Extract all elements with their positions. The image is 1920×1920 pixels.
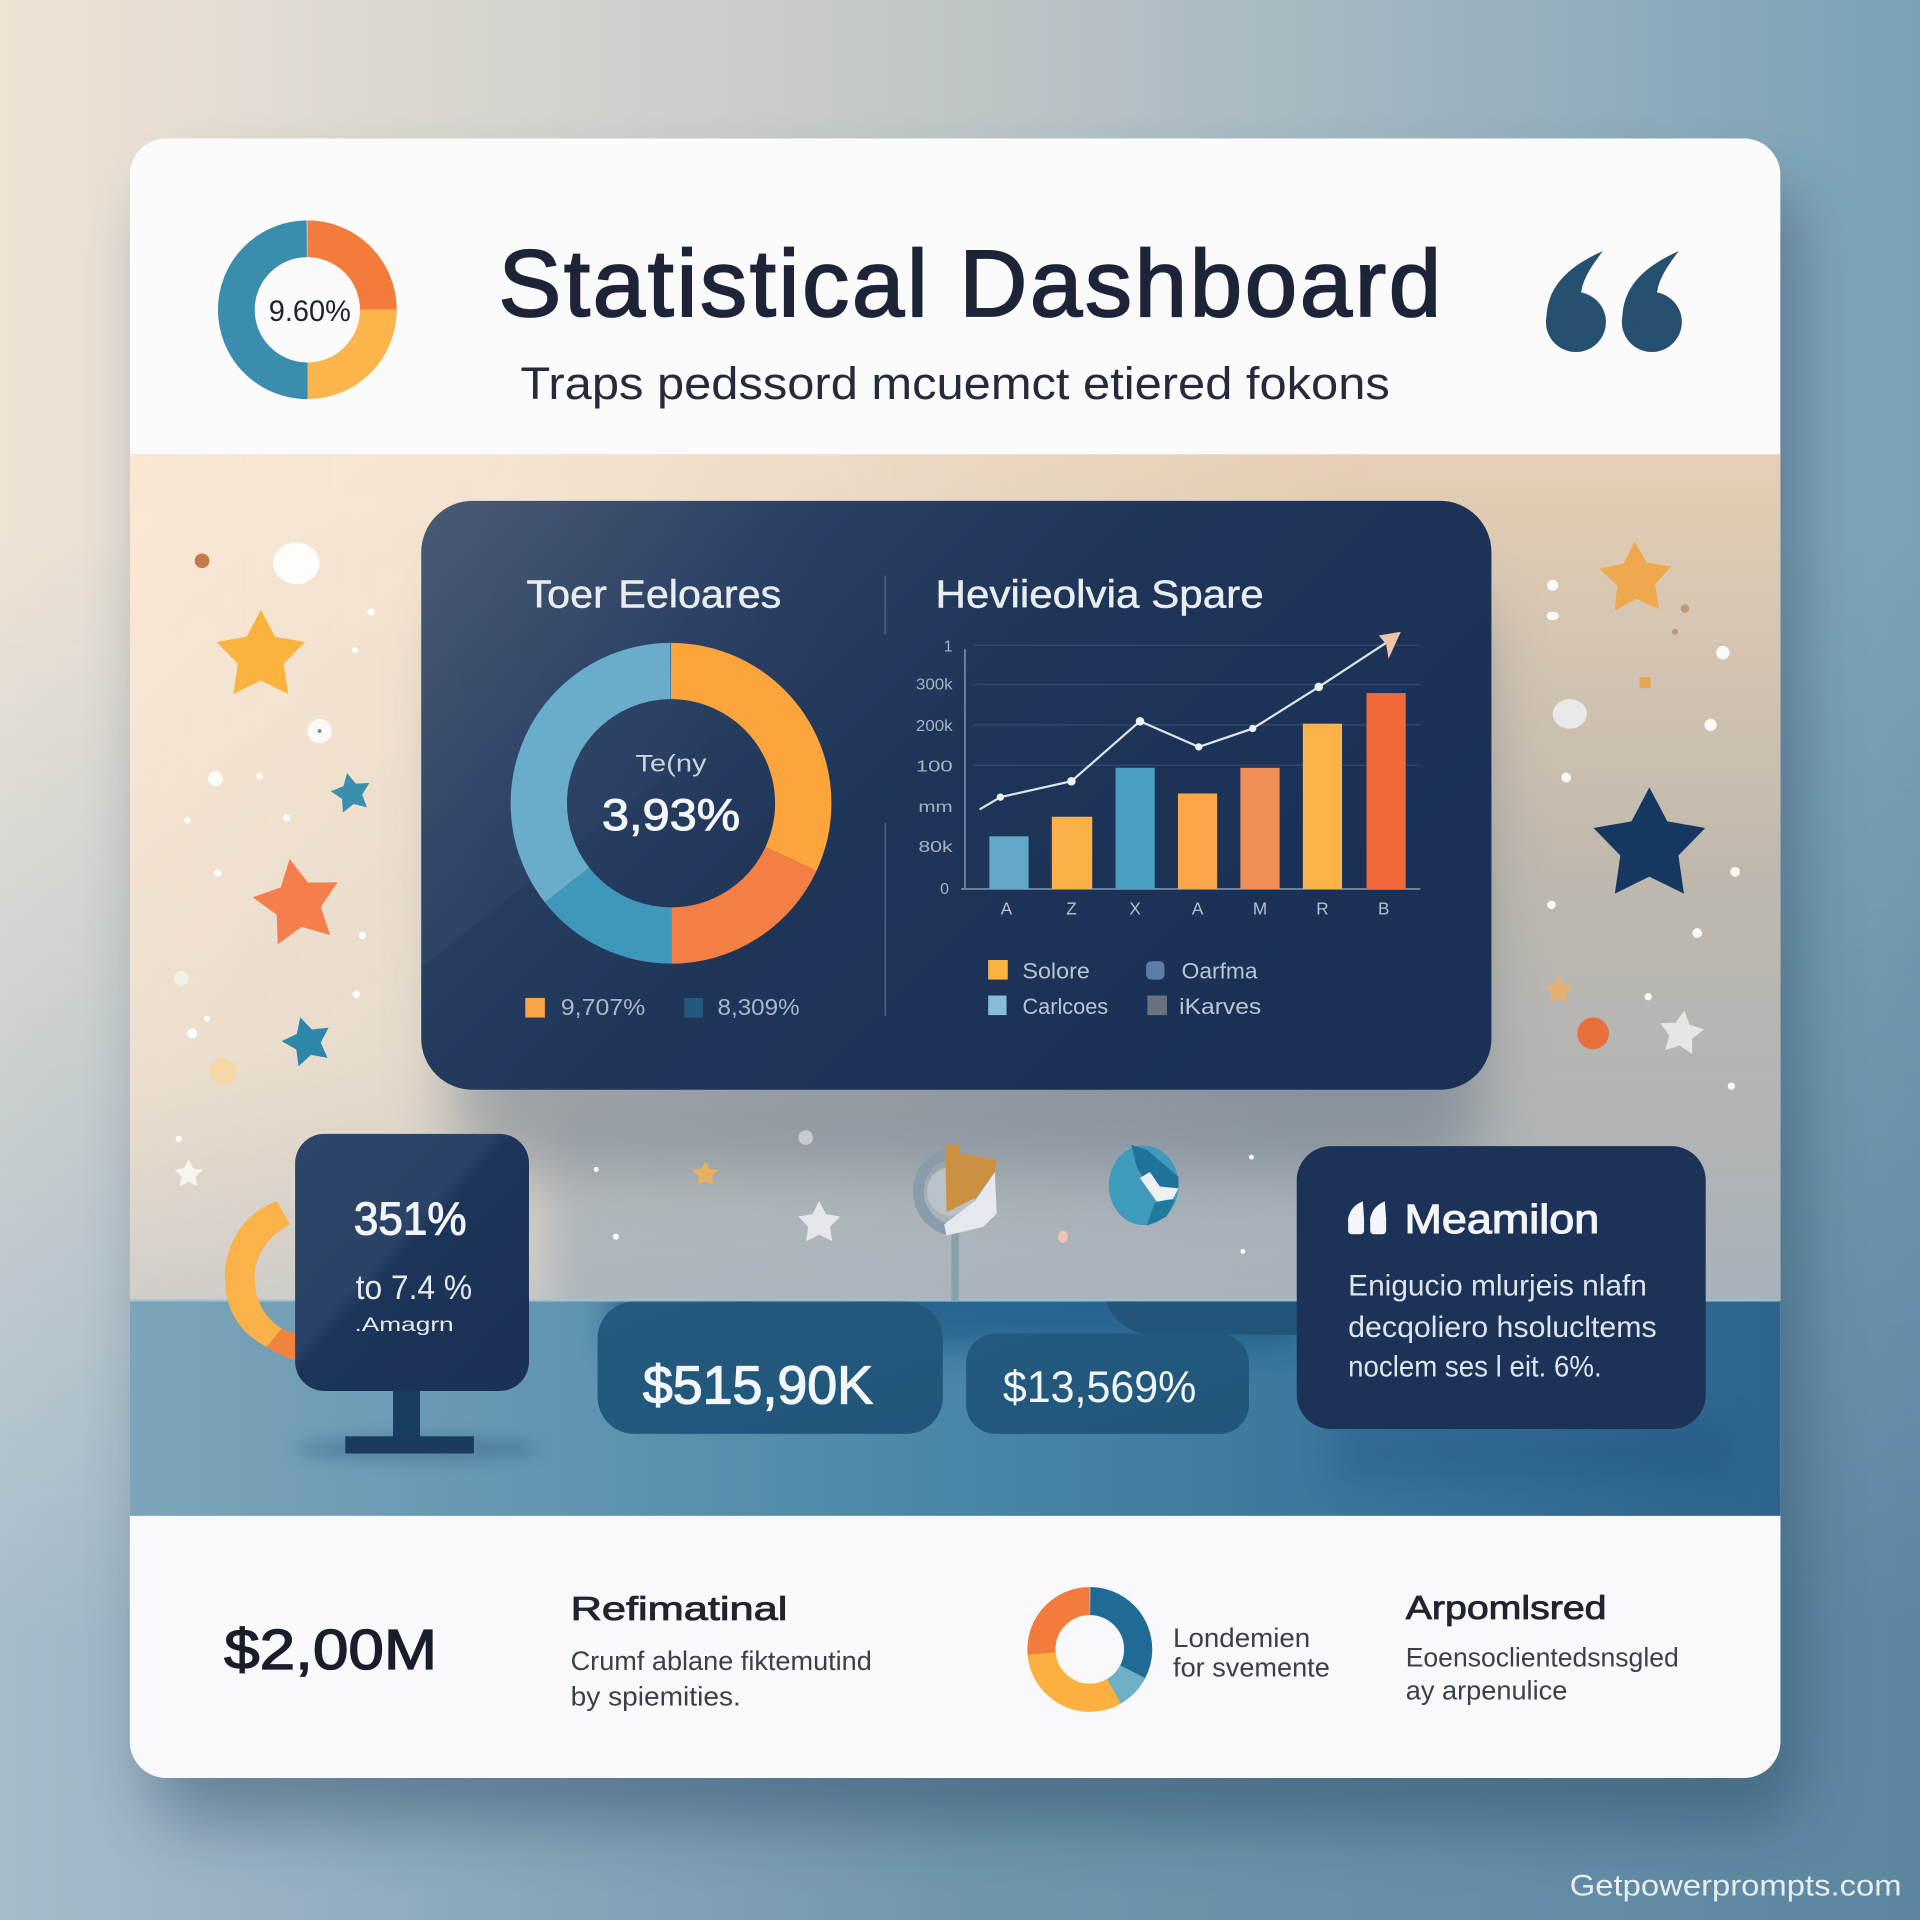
gauge arc (225, 1201, 296, 1360)
x axis labels: Z (1066, 899, 1077, 919)
stat pill: revenue (598, 1302, 943, 1434)
bar chart legend: Oarfma (1182, 958, 1258, 983)
small floating stars and dots (594, 1130, 1254, 1254)
quote card (1297, 1146, 1706, 1429)
x axis labels: R (1316, 899, 1329, 919)
donut chart: Te(ny (636, 750, 707, 777)
donut chart: 3,93% (602, 791, 740, 840)
icon: teal globe (1109, 1145, 1179, 1226)
header donut: 9.60% (269, 295, 351, 328)
dashboard panel (421, 501, 1491, 1090)
x axis labels: M (1253, 899, 1267, 919)
bar chart (916, 632, 1420, 919)
footer text block: left: by spiemities. (571, 1682, 741, 1712)
footer text block: left: Refimatinal (571, 1591, 787, 1628)
quote icon (1348, 1201, 1386, 1234)
ground band (130, 1299, 1780, 1516)
footer stat: $2,00M (224, 1618, 437, 1681)
trend line (980, 632, 1401, 809)
monitor screen: .Amagrn (354, 1314, 454, 1336)
bar chart legend: Solore (1022, 958, 1090, 983)
y axis labels: 100 (916, 758, 953, 775)
y axis labels: 300k (916, 676, 953, 693)
header donut (236, 239, 378, 381)
x axis labels: A (1192, 899, 1204, 919)
title: Statistical Dashboard (498, 231, 1441, 336)
footer donut caption: for svemente (1173, 1652, 1330, 1682)
main card (130, 138, 1780, 1778)
watermark: Getpowerprompts.com (1570, 1870, 1902, 1903)
decorative stars left (174, 542, 375, 1186)
quote card backdrop (1106, 1302, 1300, 1335)
bar chart legend: Carlcoes (1022, 994, 1108, 1019)
decorative stars right (1545, 540, 1740, 1090)
bar chart legend (988, 958, 1261, 1019)
stat pill: secondary (966, 1333, 1249, 1434)
footer donut (1041, 1601, 1138, 1698)
quote body (1348, 1270, 1657, 1383)
footer text block: right: ay arpenulice (1406, 1676, 1567, 1706)
donut legend: 9,707% (561, 994, 645, 1020)
footer text block: right (1406, 1590, 1679, 1706)
bar chart heading: Heviieolvia Spare (936, 573, 1264, 616)
bar chart legend: iKarves (1179, 994, 1261, 1019)
y axis labels: 200k (916, 718, 953, 735)
x axis labels (1001, 899, 1389, 919)
y axis labels: 1 (944, 638, 953, 655)
footer text block: right: Arpomlsred (1406, 1590, 1607, 1627)
quote body: noclem ses l eit. 6%. (1348, 1350, 1602, 1383)
x axis labels: A (1001, 899, 1013, 919)
donut chart heading: Toer Eeloares (527, 573, 781, 616)
stat pill: secondary: $13,569% (1003, 1363, 1196, 1412)
donut legend: 8,309% (718, 994, 800, 1020)
footer text block: left: Crumf ablane fiktemutind (571, 1646, 872, 1676)
y axis labels (916, 638, 953, 898)
footer text block: right: Eoensoclientedsnsgled (1406, 1643, 1679, 1673)
quote heading: Meamilon (1404, 1196, 1599, 1242)
footer section background (130, 1516, 1780, 1778)
quote body: Enigucio mlurjeis nlafn (1348, 1270, 1647, 1303)
monitor screen (295, 1134, 529, 1391)
footer text block: left (571, 1591, 872, 1712)
subtitle: Traps pedssord mcuemct etiered fokons (520, 358, 1390, 409)
metric monitor (225, 1134, 540, 1462)
dashboard panel shadow (453, 588, 1482, 1176)
monitor stand (295, 1386, 540, 1462)
donut chart (539, 671, 803, 936)
stat pill: revenue: $515,90K (643, 1355, 873, 1415)
monitor screen: to 7.4 % (356, 1269, 472, 1307)
footer donut caption (1173, 1623, 1330, 1682)
donut legend (525, 994, 800, 1020)
bars (989, 693, 1406, 889)
middle section background (130, 454, 1780, 1322)
footer donut caption: Londemien (1173, 1623, 1310, 1653)
icon: pie on stem (918, 1145, 997, 1300)
quote body: decqoliero hsolucltems (1348, 1311, 1657, 1344)
x axis labels: B (1378, 899, 1389, 919)
x axis labels: X (1129, 899, 1141, 919)
y axis labels: 80k (918, 839, 953, 856)
icon: quotation mark (1546, 251, 1682, 352)
monitor screen: 351% (354, 1192, 467, 1244)
card shadow (149, 184, 1800, 1823)
panel dividers (884, 576, 886, 1016)
y axis labels: 0 (940, 881, 949, 898)
y axis labels: mm (918, 799, 953, 816)
